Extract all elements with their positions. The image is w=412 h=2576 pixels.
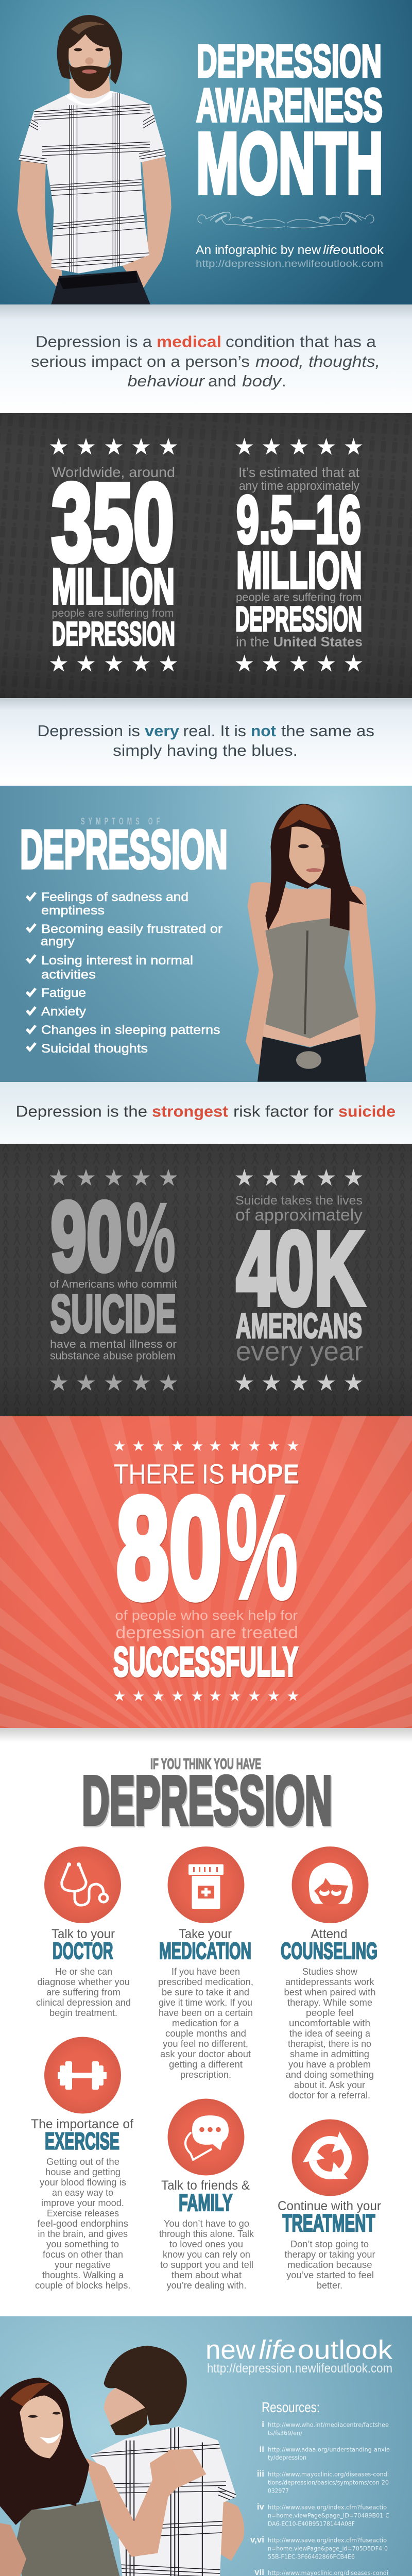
stat: 90 percent: SUICIDE bbox=[50, 1284, 176, 1343]
text: definition of depression: Depression is a bbox=[36, 333, 152, 350]
heading: there is hope: HOPE bbox=[231, 1459, 299, 1490]
text: strongest risk factor for suicide bbox=[15, 1103, 396, 1120]
panel: footer bbox=[0, 2316, 412, 2576]
text block: clinical depression and bbox=[36, 1997, 131, 2008]
heading bbox=[52, 1927, 115, 1964]
brand: newlifeoutlook: outlook bbox=[298, 2335, 393, 2365]
text block bbox=[158, 1967, 253, 2080]
reference links bbox=[268, 2421, 390, 2576]
text block: have been on a certain bbox=[159, 2008, 253, 2018]
reference links: http://www.who.int/mediacentre/factshee bbox=[268, 2421, 389, 2429]
text block: best when paired with bbox=[284, 1987, 376, 1997]
text block: be sure to take it and bbox=[162, 1987, 249, 1997]
icon: pill bottle bbox=[168, 1846, 244, 1923]
text block: Studies show bbox=[302, 1967, 358, 1977]
reference links: DA6-EC10-E40B95178144A08F bbox=[268, 2520, 355, 2528]
text: depression is very real: real. It is bbox=[183, 722, 246, 740]
stars: top row bbox=[114, 1440, 299, 1451]
heading: EXERCISE bbox=[45, 2127, 119, 2154]
list: symptoms checklist: Anxiety bbox=[41, 1005, 86, 1019]
text: treated successfully bbox=[113, 1607, 298, 1685]
stat: 9.5-16 million in the United States: It’s estimated that at bbox=[238, 465, 359, 480]
stat: 9.5-16 million in the United States: any time approximately bbox=[239, 479, 359, 493]
stat: 9.5-16 million in the United States: United States bbox=[273, 634, 363, 649]
heading: The importance of bbox=[31, 2117, 133, 2131]
heading bbox=[278, 2199, 381, 2236]
text block: and doing something bbox=[285, 2070, 374, 2080]
text: strongest risk factor for suicide: risk factor for bbox=[233, 1103, 334, 1120]
text: definition of depression: condition that has a bbox=[226, 333, 376, 350]
panel: prevalence statistics bbox=[0, 413, 412, 698]
byline: life bbox=[323, 243, 340, 257]
stat: 9.5-16 million in the United States bbox=[235, 438, 363, 672]
text: strongest risk factor for suicide: strongest bbox=[152, 1103, 228, 1120]
stat: 40K Americans every year: of approximately bbox=[235, 1206, 363, 1224]
text block: uncomfortable with bbox=[289, 2018, 370, 2028]
text block: Don’t stop going to bbox=[290, 2239, 369, 2249]
heading: if you think you have depression: IF YOU THINK YOU HAVE bbox=[150, 1756, 261, 1772]
text block: antidepressants work bbox=[285, 1977, 375, 1987]
text: depression is very real: very bbox=[145, 722, 180, 740]
text block: in the brain, and gives bbox=[38, 2229, 128, 2239]
stat: 9.5-16 million in the United States: in the bbox=[236, 634, 269, 649]
list: symptoms checklist: Changes in sleeping patterns bbox=[41, 1023, 220, 1037]
reference links: ty/depression bbox=[268, 2454, 306, 2461]
list: symptoms checklist bbox=[26, 890, 222, 1056]
text block: doctor for a referral. bbox=[289, 2090, 370, 2100]
list: symptoms checklist: Losing interest in normal bbox=[41, 954, 193, 968]
stars: top row bbox=[50, 1169, 177, 1186]
text: definition of depression: serious impact on a person’s bbox=[31, 352, 250, 370]
text: treated successfully: depression are treated bbox=[115, 1623, 298, 1641]
stat: 9.5-16 million in the United States: people are suffering from bbox=[236, 590, 362, 604]
list: symptoms checklist: Becoming easily frustrated or bbox=[41, 922, 222, 936]
heading: Talk to your bbox=[52, 1927, 115, 1941]
text block: through this alone. Talk bbox=[159, 2229, 254, 2239]
text block: getting a different bbox=[169, 2059, 243, 2070]
card: continue with your treatment bbox=[278, 2120, 381, 2291]
icon: stethoscope bbox=[44, 1846, 121, 1923]
text block: Getting out of the bbox=[46, 2157, 119, 2167]
stat: 90 percent: 90 bbox=[50, 1182, 123, 1292]
stars: bottom row bbox=[235, 1374, 363, 1391]
text block: couple of blocks helps. bbox=[35, 2280, 131, 2291]
reference links: n=home.viewPage&page_id=705D5DF4-0 bbox=[268, 2545, 388, 2552]
text block bbox=[284, 1967, 376, 2100]
text block: shame in admitting bbox=[290, 2049, 369, 2059]
resources list bbox=[250, 2399, 390, 2576]
heading: Continue with your bbox=[278, 2199, 381, 2213]
reference numerals: v,vi bbox=[250, 2535, 264, 2545]
text block: prescribed medication, bbox=[158, 1977, 253, 1987]
reference links: http://www.save.org/index.cfm?fuseactio bbox=[268, 2537, 387, 2544]
text block: therapist, there is no bbox=[288, 2039, 371, 2049]
stat: 90 percent: substance abuse problem bbox=[50, 1350, 176, 1362]
card: attend counseling bbox=[281, 1846, 377, 2100]
heading: symptoms of depression: SYMPTOMS OF bbox=[81, 817, 160, 827]
reference links: n=home.viewPage&page_ID=70489B01-C bbox=[268, 2512, 389, 2519]
heading: there is hope: THERE IS bbox=[114, 1459, 225, 1490]
photo: young man in plaid t-shirt bbox=[18, 15, 171, 304]
text block: you have a problem bbox=[288, 2059, 371, 2070]
reference numerals bbox=[250, 2419, 265, 2576]
heading: Take your bbox=[179, 1927, 232, 1941]
text: definition of depression: medical bbox=[157, 333, 221, 350]
text block: your blood flowing is bbox=[40, 2177, 126, 2188]
heading bbox=[159, 1927, 251, 1964]
photo: couple holding hands bbox=[0, 2346, 244, 2576]
byline: http://depression.newlifeoutlook.com bbox=[196, 258, 383, 269]
stat: 350 million worldwide: 350 bbox=[52, 461, 174, 584]
text block bbox=[36, 1967, 131, 2018]
text block: are suffering from bbox=[46, 1987, 121, 1997]
text: strongest risk factor for suicide: Depression is the bbox=[15, 1103, 147, 1120]
photo: young woman in grey corset bbox=[246, 804, 376, 1082]
text block bbox=[35, 2157, 131, 2291]
list: symptoms checklist: Suicidal thoughts bbox=[41, 1042, 148, 1056]
stat: 350 million worldwide: DEPRESSION bbox=[52, 615, 175, 652]
icon: circular arrows bbox=[291, 2120, 369, 2196]
byline: An infographic by new bbox=[196, 243, 321, 257]
text block: them about what bbox=[171, 2270, 242, 2280]
text block: medication for a bbox=[172, 2018, 239, 2028]
icon: chat bubbles bbox=[168, 2099, 244, 2175]
list: symptoms checklist: Fatigue bbox=[41, 986, 86, 1000]
list: symptoms checklist: activities bbox=[41, 968, 96, 982]
icon: dumbbell bbox=[44, 2037, 121, 2113]
text: treated successfully: of people who seek help for bbox=[115, 1607, 298, 1623]
panel: if you think you have depression bbox=[0, 1728, 412, 2316]
text block: couple months and bbox=[165, 2028, 246, 2039]
text block: If you have been bbox=[171, 1967, 240, 1977]
text: depression is very real: the same as bbox=[281, 722, 374, 740]
text block: house and getting bbox=[45, 2167, 121, 2177]
text: strongest risk factor for suicide: suicide bbox=[338, 1103, 396, 1120]
text: depression is very real: simply having the blues. bbox=[113, 741, 298, 759]
text block: diagnose whether you bbox=[37, 1977, 130, 1987]
stat: 90 percent: % bbox=[126, 1183, 176, 1292]
text block: an easy way to bbox=[52, 2188, 113, 2198]
panel: medical condition statement bbox=[0, 304, 412, 413]
text: depression is very real: not bbox=[251, 722, 276, 740]
heading: symptoms of depression bbox=[20, 817, 228, 880]
icon: check marks bbox=[26, 892, 37, 1052]
stat: 80 percent: 80 bbox=[116, 1468, 222, 1629]
stat: 90 percent bbox=[49, 1169, 177, 1391]
text: definition of depression: . bbox=[282, 372, 286, 390]
text: depression is very real: Depression is bbox=[37, 722, 140, 740]
text block bbox=[159, 2218, 254, 2291]
panel: suicide statistics bbox=[0, 1144, 412, 1416]
card: take your medication bbox=[158, 1846, 253, 2080]
heading: MEDICATION bbox=[159, 1938, 251, 1964]
stars: top row bbox=[235, 438, 363, 455]
stars: bottom row bbox=[114, 1690, 299, 1701]
list: symptoms checklist: angry bbox=[41, 935, 75, 948]
text block: begin treatment. bbox=[49, 2008, 117, 2018]
stat: 40K Americans every year: every year bbox=[236, 1336, 363, 1366]
heading: Talk to friends & bbox=[161, 2178, 250, 2193]
text block: you’ve started to feel bbox=[286, 2270, 374, 2280]
text: definition of depression: mood, thoughts, bbox=[255, 352, 380, 370]
byline: outlook bbox=[341, 243, 384, 257]
stars: top row bbox=[50, 438, 177, 455]
brand: newlifeoutlook: http://depression.newlifeoutlook.com bbox=[207, 2361, 392, 2376]
heading bbox=[281, 1927, 377, 1964]
heading: Attend bbox=[311, 1927, 347, 1941]
list: symptoms checklist: emptiness bbox=[41, 904, 105, 918]
text: definition of depression bbox=[31, 333, 380, 390]
reference numerals: iv bbox=[257, 2502, 265, 2512]
heading: DOCTOR bbox=[53, 1938, 113, 1964]
card: talk to friends and family bbox=[159, 2099, 254, 2291]
byline bbox=[196, 243, 384, 269]
stat: 90 percent: of Americans who commit bbox=[49, 1279, 177, 1290]
panel: there is hope bbox=[0, 1416, 412, 1728]
brand: newlifeoutlook: life bbox=[259, 2335, 296, 2365]
reference links: http://www.adaa.org/understanding-anxie bbox=[268, 2446, 390, 2453]
text block: therapy. While some bbox=[287, 1997, 372, 2008]
panel: hero bbox=[0, 0, 412, 304]
text block: you something to bbox=[46, 2239, 119, 2249]
text block: your negative bbox=[55, 2260, 111, 2270]
stat: 90 percent: have a mental illness or bbox=[50, 1338, 177, 1350]
text block: give it time work. If you bbox=[159, 1997, 252, 2008]
stars: bottom row bbox=[235, 655, 363, 672]
stars: bottom row bbox=[50, 1374, 177, 1391]
heading: there is hope bbox=[114, 1459, 299, 1490]
stars: bottom row bbox=[50, 655, 177, 672]
heading: symptoms of depression: DEPRESSION bbox=[20, 819, 228, 880]
stat: 350 million worldwide: MILLION bbox=[52, 558, 175, 614]
panel: strongest risk factor statement bbox=[0, 1082, 412, 1144]
text block: people feel bbox=[306, 2008, 354, 2018]
panel: not just the blues statement bbox=[0, 698, 412, 786]
stat: 350 million worldwide: people are suffering from bbox=[52, 607, 174, 619]
text block: you’re dealing with. bbox=[167, 2280, 246, 2291]
stat: 40K Americans every year: Suicide takes the lives bbox=[235, 1194, 363, 1208]
text: definition of depression: behaviour bbox=[128, 372, 205, 390]
brand: newlifeoutlook bbox=[205, 2335, 393, 2376]
text block: better. bbox=[317, 2280, 342, 2291]
text block: Exercise releases bbox=[47, 2208, 119, 2218]
stat: 350 million worldwide: Worldwide, around bbox=[52, 464, 175, 480]
reference links: 55B-F1EC-3F66462866FCB4E6 bbox=[268, 2553, 355, 2561]
reference links: tions/depression/basics/symptoms/con-20 bbox=[268, 2479, 389, 2486]
reference numerals: i bbox=[262, 2419, 264, 2429]
reference links: http://www.save.org/index.cfm?fuseactio bbox=[268, 2504, 387, 2511]
text block: You don’t have to go bbox=[164, 2218, 249, 2229]
heading bbox=[161, 2178, 250, 2216]
text block: to loved ones you bbox=[169, 2239, 243, 2249]
resources list: Resources: bbox=[262, 2399, 320, 2415]
title: Depression Awareness Month bbox=[196, 35, 383, 212]
text: depression is very real bbox=[37, 722, 374, 759]
text block: ask your doctor about bbox=[160, 2049, 251, 2059]
reference numerals: ii bbox=[260, 2444, 264, 2454]
text block: feel-good endorphins bbox=[37, 2218, 128, 2229]
text block: prescription. bbox=[180, 2070, 231, 2080]
text block: about it. Ask your bbox=[294, 2080, 365, 2090]
text block: therapy or taking your bbox=[284, 2249, 375, 2260]
card: talk to your doctor bbox=[36, 1846, 131, 2018]
list: symptoms checklist: Feelings of sadness and bbox=[41, 890, 188, 904]
heading: FAMILY bbox=[179, 2189, 233, 2216]
card: importance of exercise bbox=[31, 2037, 133, 2291]
text block: medication because bbox=[287, 2260, 372, 2270]
text block: the idea of seeing a bbox=[289, 2028, 371, 2039]
icon: counselor with glasses bbox=[291, 1846, 369, 1923]
panel: symptoms of depression bbox=[0, 786, 412, 1082]
text block: improve your mood. bbox=[41, 2198, 124, 2208]
text block: He or she can bbox=[55, 1967, 112, 1977]
text: definition of depression: and bbox=[208, 372, 236, 390]
text block: thoughts. Walking a bbox=[42, 2270, 124, 2280]
stars: top row bbox=[235, 1169, 363, 1186]
text: definition of depression: body bbox=[242, 372, 283, 390]
text block: know you can rely on bbox=[163, 2249, 250, 2260]
text block bbox=[284, 2239, 375, 2291]
stat: 350 million worldwide bbox=[50, 438, 177, 672]
brand: newlifeoutlook: new bbox=[205, 2335, 255, 2365]
stat: 80 percent: % bbox=[226, 1464, 298, 1631]
reference links: ts/fs369/en/ bbox=[268, 2430, 302, 2437]
reference links: http://www.mayoclinic.org/diseases-condi bbox=[268, 2471, 389, 2478]
icon: ornamental flourish divider bbox=[198, 212, 374, 228]
heading bbox=[31, 2117, 133, 2154]
text block: to support you and tell bbox=[160, 2260, 253, 2270]
text block: you feel no different, bbox=[163, 2039, 248, 2049]
text block: focus on other than bbox=[43, 2249, 123, 2260]
reference links: 032977 bbox=[268, 2487, 289, 2495]
stat: 40K Americans every year bbox=[235, 1169, 364, 1391]
reference numerals: iii bbox=[257, 2469, 264, 2479]
